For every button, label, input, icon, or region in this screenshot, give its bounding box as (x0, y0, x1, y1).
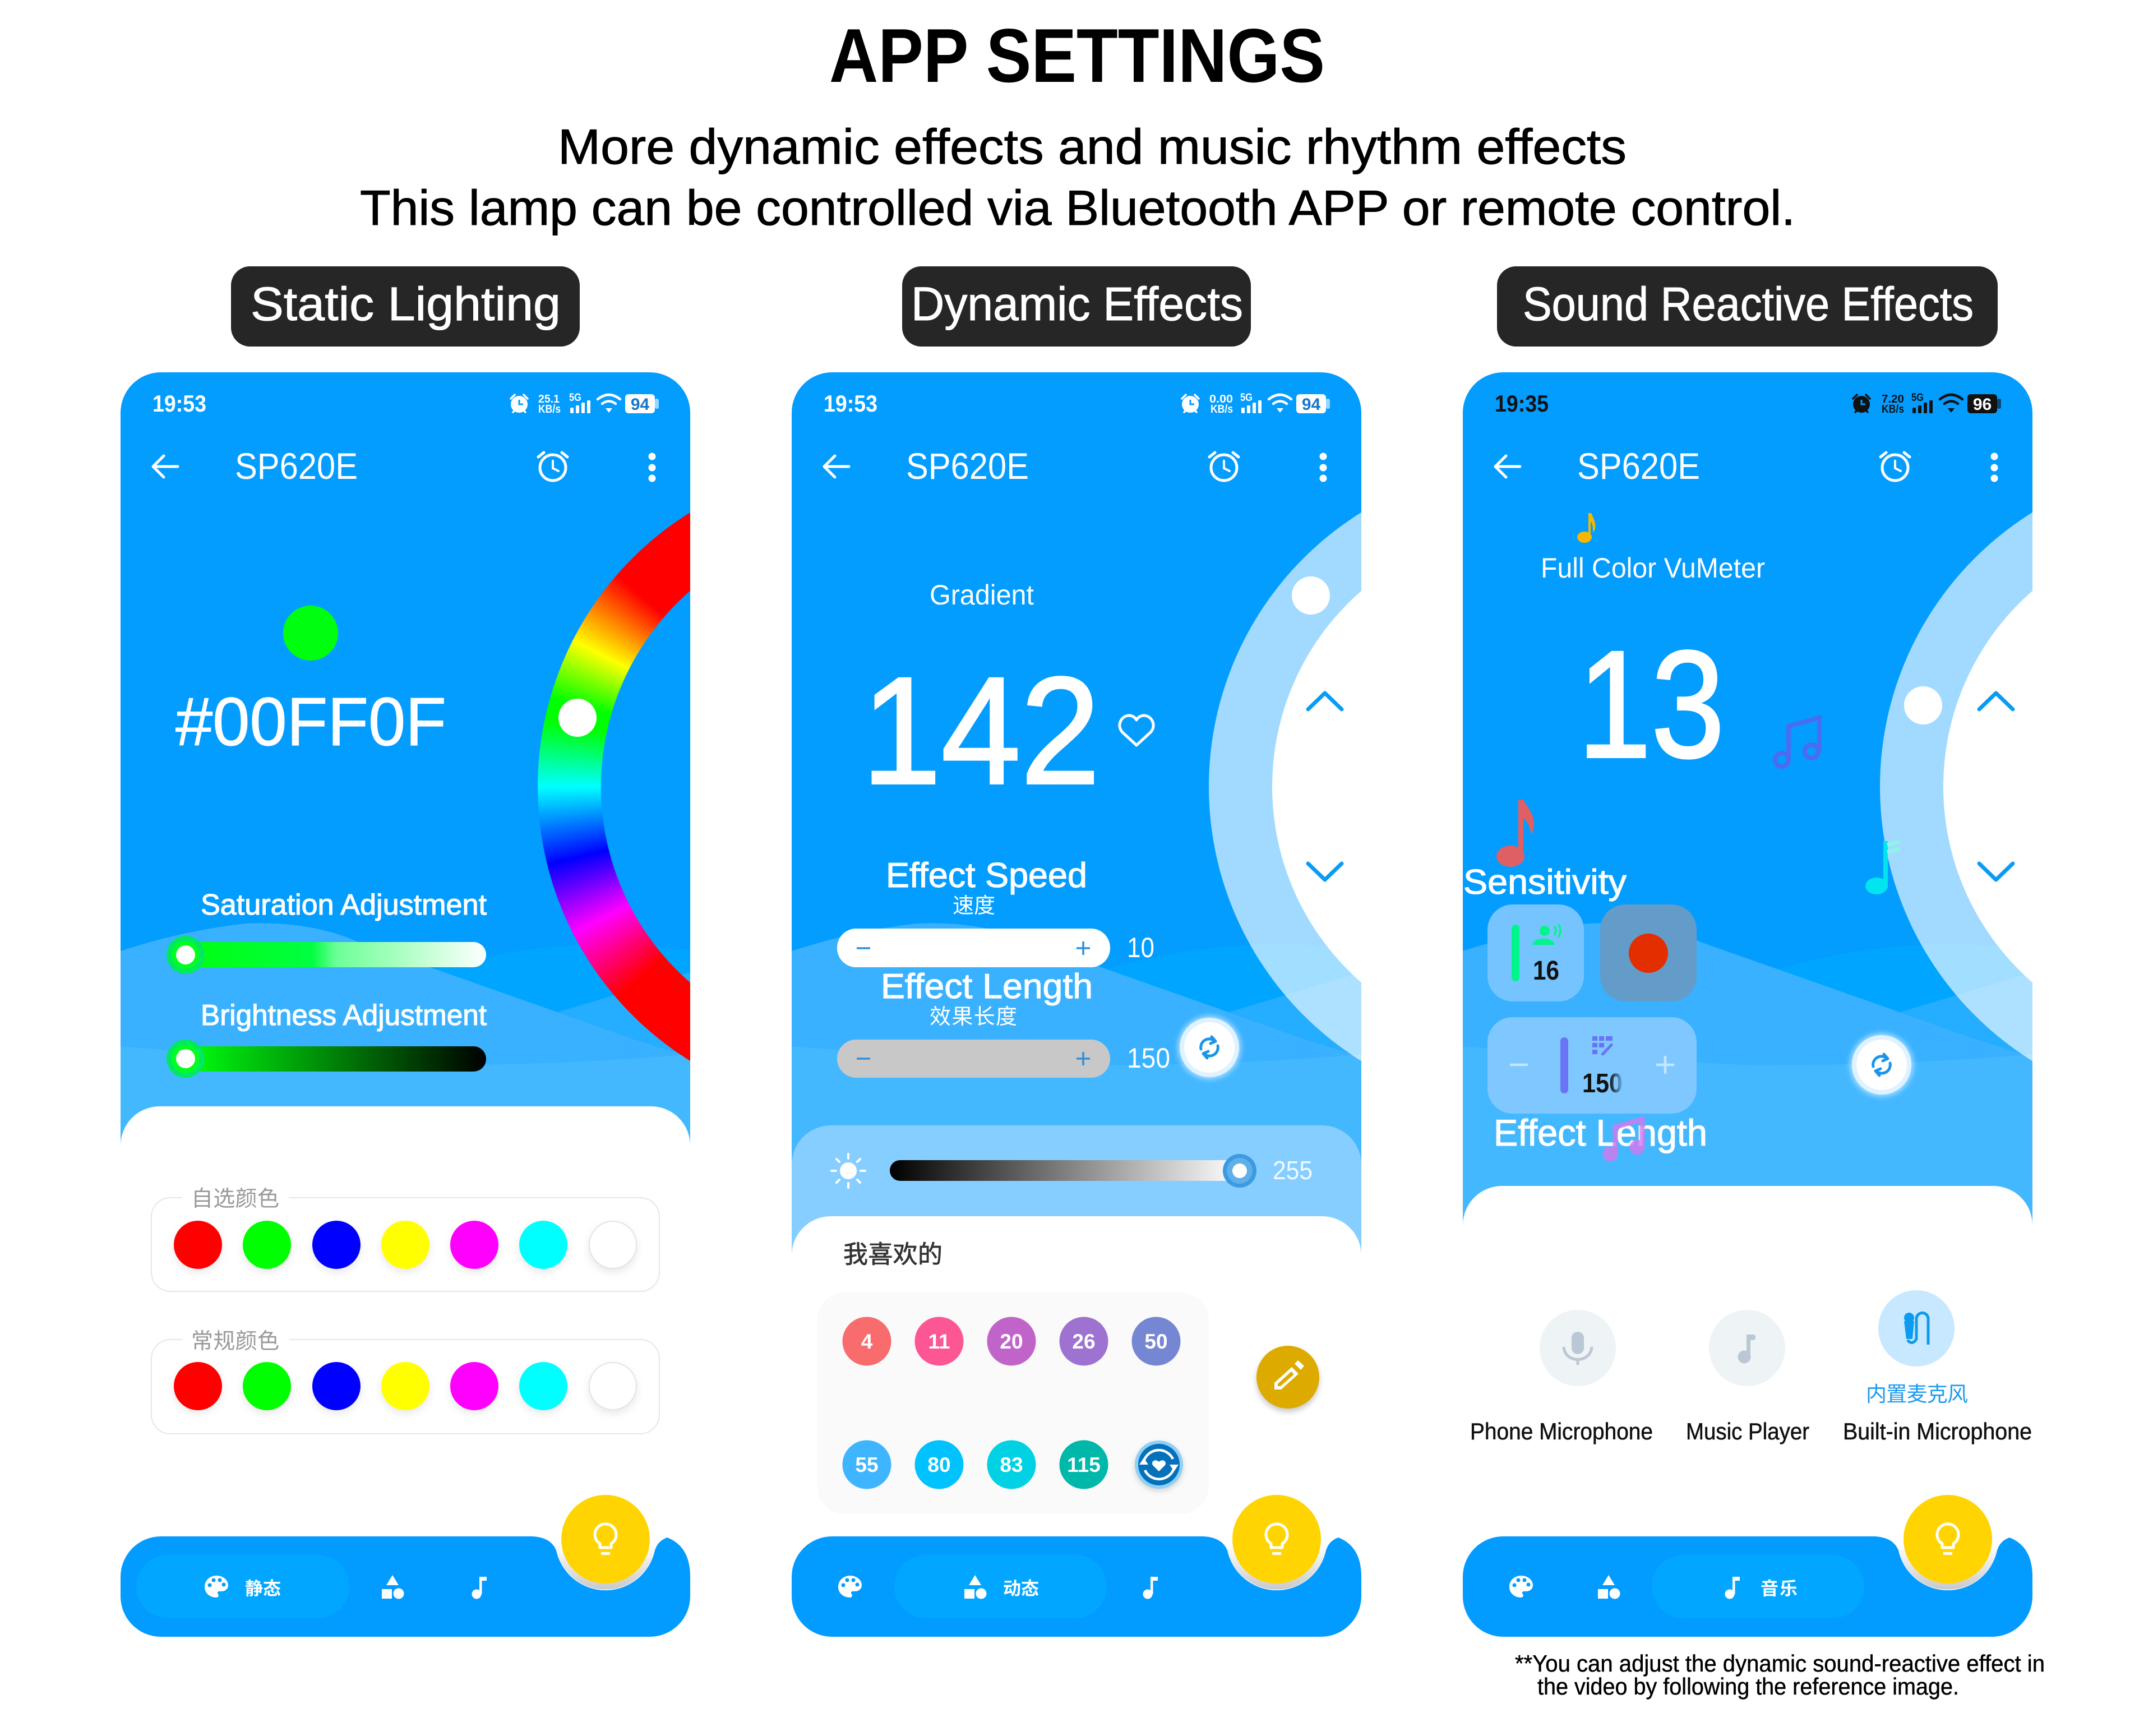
footnote: the video by following the reference image. (1537, 1673, 1959, 1700)
favorites grid: 20 (1000, 1330, 1023, 1353)
effect name: Full Color VuMeter (1541, 552, 1765, 584)
refresh button (1850, 1033, 1913, 1096)
status bar (1495, 390, 2001, 417)
white lower panel (1463, 1186, 2032, 1548)
source: phone microphone: Phone Microphone (1470, 1418, 1653, 1444)
sensitivity label: Sensitivity (1463, 863, 1627, 902)
status bar: 19:53 (153, 390, 206, 417)
heading: static lighting (231, 266, 580, 347)
status bar: 94 (631, 395, 649, 414)
icon: heart (1120, 715, 1153, 745)
favorites grid: 11 (928, 1330, 950, 1353)
favorites grid: 26 (1072, 1330, 1096, 1353)
source: music player: Music Player (1686, 1418, 1809, 1444)
bottom navigation (121, 1536, 690, 1637)
saturation slider (167, 889, 487, 974)
source: built-in microphone (1843, 1290, 2032, 1444)
effect length slider (837, 967, 1170, 1078)
light button (1226, 1489, 1327, 1590)
panel: dynamic effects phone (792, 372, 1361, 1637)
favorites grid (817, 1292, 1209, 1514)
light button (1897, 1489, 1998, 1590)
color wheel (538, 513, 690, 1061)
status bar: 25.1 (538, 393, 560, 405)
icon: red note (1496, 800, 1534, 867)
effect number: 13 (1578, 619, 1725, 789)
effect length slider: Effect Length (881, 967, 1093, 1006)
dial (1209, 513, 1361, 1061)
effect length label: Effect Length (1494, 1112, 1707, 1153)
brightness panel (792, 1125, 1361, 1255)
source: music player (1686, 1310, 1809, 1444)
icon: yellow note (1577, 513, 1595, 543)
selected color dot (283, 606, 338, 661)
effect name: Gradient (930, 579, 1034, 611)
sensitivity card: 16 (1533, 956, 1559, 986)
refresh button (1178, 1016, 1241, 1079)
bottom navigation: 静态 (245, 1578, 281, 1599)
edit button (1256, 1346, 1319, 1412)
bottom navigation: 动态 (1003, 1578, 1039, 1599)
effect number: 142 (862, 645, 1100, 816)
effect speed slider: 速度 (953, 894, 995, 918)
light button (555, 1489, 656, 1590)
brightness slider: Brightness Adjustment (201, 999, 487, 1032)
status bar: 19:35 (1495, 390, 1549, 417)
app bar (153, 445, 656, 487)
app bar (824, 445, 1327, 487)
status bar: KB/s (538, 403, 561, 415)
status bar (153, 390, 659, 417)
footnote (1515, 1650, 2045, 1700)
status bar: 0.00 (1209, 393, 1233, 405)
bottom navigation (792, 1536, 1361, 1637)
hex value: #00FF0F (175, 684, 446, 760)
app bar (1495, 445, 1998, 487)
bottom navigation (1463, 1536, 2032, 1637)
effect length slider: 150 (1127, 1042, 1170, 1074)
heading: sound reactive effects: Sound Reactive Effects (1523, 278, 1974, 330)
heading: static lighting: Static Lighting (251, 278, 561, 330)
brightness bar (831, 1154, 1313, 1188)
favorites grid: 83 (1000, 1453, 1023, 1476)
favorites grid: 50 (1144, 1330, 1168, 1353)
dial (1880, 513, 2032, 1061)
source: phone microphone (1470, 1310, 1653, 1444)
heading: sound reactive effects (1497, 266, 1998, 347)
standard colors group: 常规颜色 (191, 1329, 279, 1354)
subtitle: This lamp can be controlled via Bluetooth APP or remote control. (360, 180, 1795, 236)
favorites grid: 80 (927, 1453, 951, 1476)
brightness bar: 255 (1273, 1156, 1313, 1185)
source: built-in microphone: 内置麦克风 (1866, 1383, 1968, 1406)
favorites heading: 我喜欢的 (843, 1241, 942, 1268)
icon: pink note (1605, 1119, 1642, 1159)
bottom navigation: 音乐 (1761, 1578, 1798, 1599)
icon: loop favorites (1135, 1440, 1183, 1491)
sensitivity card (1487, 904, 1584, 1001)
custom colors group: 自选颜色 (191, 1187, 279, 1211)
favorites grid: 4 (861, 1330, 873, 1353)
effect speed slider: Effect Speed (886, 856, 1087, 895)
heading: dynamic effects: Dynamic Effects (911, 278, 1243, 330)
standard colors group (151, 1329, 659, 1434)
app bar: SP620E (906, 445, 1029, 487)
footnote: **You can adjust the dynamic sound-reactive effect in (1515, 1650, 2045, 1677)
status bar: 5G (569, 392, 581, 404)
subtitle (360, 119, 1795, 236)
panel: static lighting phone (121, 372, 690, 1637)
status bar: KB/s (1211, 403, 1233, 415)
icon: blue note (1775, 718, 1819, 767)
saturation slider: Saturation Adjustment (201, 889, 487, 921)
effect length card (1487, 1017, 1697, 1114)
white lower panel (792, 1216, 1361, 1548)
icon: cyan note (1865, 841, 1900, 894)
title: APP SETTINGS (829, 13, 1325, 98)
favorites grid: 115 (1067, 1453, 1101, 1476)
status bar: 5G (1240, 392, 1253, 404)
source: built-in microphone: Built-in Microphone (1843, 1418, 2032, 1444)
effect speed slider: 10 (1127, 932, 1154, 963)
status bar: 7.20 (1882, 393, 1904, 405)
effect length card: 150 (1582, 1069, 1623, 1098)
app bar: SP620E (235, 445, 358, 487)
custom colors group (151, 1187, 659, 1291)
status bar: 19:53 (824, 390, 877, 417)
status bar: 94 (1302, 395, 1320, 414)
app bar: SP620E (1577, 445, 1700, 487)
status bar: 5G (1911, 392, 1924, 404)
white lower panel (121, 1106, 690, 1548)
panel: sound reactive phone (1463, 372, 2032, 1637)
favorites grid: 55 (855, 1453, 879, 1476)
record card (1600, 904, 1697, 1001)
brightness slider (167, 999, 487, 1078)
status bar: KB/s (1882, 403, 1904, 415)
effect length slider: 效果长度 (930, 1005, 1017, 1029)
effect speed slider (837, 856, 1154, 967)
heading: dynamic effects (902, 266, 1251, 347)
subtitle: More dynamic effects and music rhythm effects (558, 119, 1627, 174)
status bar (824, 390, 1330, 417)
wheel handle (558, 699, 597, 737)
status bar: 96 (1973, 395, 1992, 414)
